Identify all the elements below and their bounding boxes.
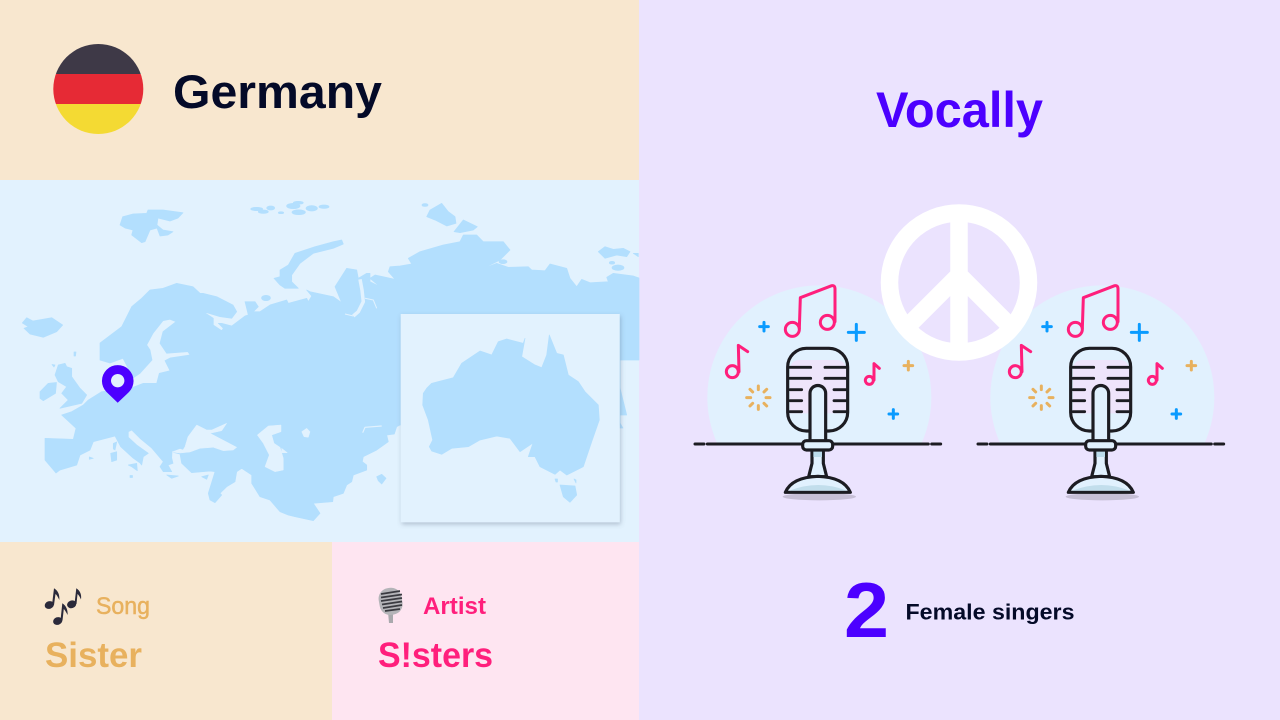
number: 2: 2	[844, 566, 889, 654]
island: Novaya Zemlya	[274, 240, 343, 288]
icon: German flag	[53, 44, 144, 134]
label: Song: Song	[96, 593, 150, 620]
islands: Severnaya Zemlya	[422, 204, 428, 206]
inset: Australia	[401, 314, 620, 522]
heading: Vocally: Vocally	[876, 82, 1043, 138]
island: Great Britain	[55, 363, 87, 408]
heading: Germany: Germany	[173, 65, 382, 118]
island: Kolguev	[262, 295, 270, 301]
label: Female singers: Female singers	[906, 600, 1074, 624]
panel: song	[0, 542, 332, 720]
icon: music notes	[44, 588, 81, 626]
panel: map	[0, 180, 639, 542]
label: Artist: Artist	[423, 593, 486, 620]
stat: number of singers	[844, 566, 1074, 654]
icon: microphone emoji	[377, 586, 404, 623]
value: Sister: Sister	[45, 636, 142, 675]
icon: location pin	[102, 365, 134, 403]
island: Iceland	[22, 318, 63, 337]
islands: Svalbard	[120, 210, 183, 243]
value: S!sters: S!sters	[378, 636, 493, 675]
islands: Mediterranean and small	[52, 352, 208, 479]
illustration: second singer microphone	[978, 285, 1224, 509]
island: Sri Lanka	[377, 474, 386, 484]
background panel: vocally	[639, 0, 1280, 720]
icon: peace sign	[890, 213, 1028, 352]
panel: artist	[332, 542, 639, 720]
island: Ireland	[40, 382, 56, 401]
illustration: first singer microphone	[695, 285, 941, 509]
inland seas	[172, 279, 382, 472]
islands: New Siberian	[598, 247, 638, 258]
islands: Franz Josef Land	[251, 207, 263, 211]
map: Eurasia landmass	[22, 201, 639, 521]
panel: country header	[0, 0, 639, 180]
